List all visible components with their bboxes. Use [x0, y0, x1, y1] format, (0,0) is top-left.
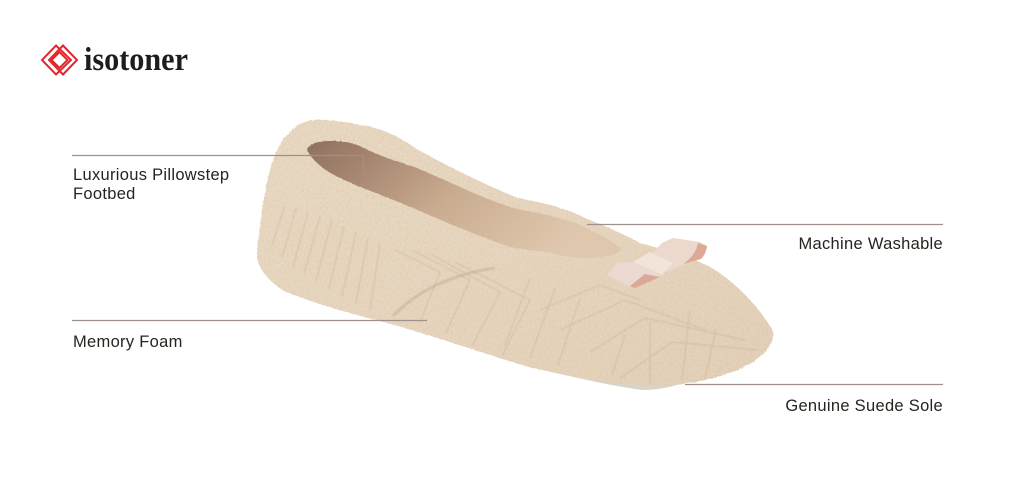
label: Genuine Suede Sole: Genuine Suede Sole: [785, 397, 943, 415]
bow right loop: [650, 238, 707, 272]
label: Machine Washable: Machine Washable: [798, 235, 943, 253]
label: Luxurious Pillowstep Footbed: Luxurious Pillowstep: [73, 166, 229, 184]
bow knot: [633, 252, 673, 275]
slipper illustration with callout lines: [40, 44, 943, 390]
callout line: Genuine Suede Sole: [685, 384, 943, 386]
callout line: Machine Washable: [587, 224, 943, 226]
shoe opening and footbed: [307, 141, 622, 258]
logo mark: [42, 46, 77, 74]
fold shadow: [393, 268, 495, 316]
callout line: Luxurious Pillowstep Footbed: [72, 156, 364, 177]
slipper body: [257, 120, 773, 386]
label: Luxurious Pillowstep Footbed: [73, 166, 229, 202]
label: Luxurious Pillowstep Footbed: Footbed: [73, 184, 136, 202]
bow: [607, 238, 707, 288]
callout line: Memory Foam: [72, 320, 427, 322]
suede sole: [505, 356, 680, 390]
knit texture: [250, 115, 780, 395]
logo wordmark: isotoner: [84, 42, 188, 78]
icon: slipper: [250, 115, 780, 395]
bow left loop: [607, 262, 660, 288]
label: Memory Foam: Memory Foam: [73, 333, 183, 351]
